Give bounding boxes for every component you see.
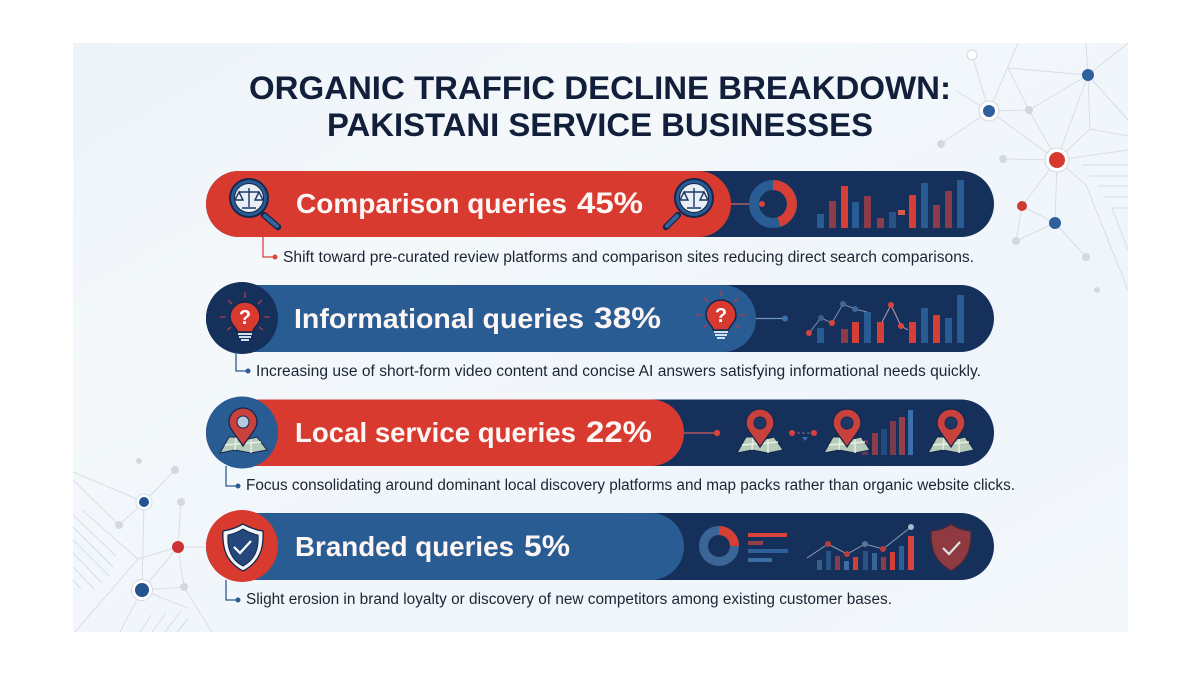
icon: pin map 3: [928, 409, 974, 453]
bar and line chart: [806, 295, 964, 343]
donut chart: [704, 530, 734, 562]
description: Focus consolidating around dominant local discovery platforms and map packs rather than organic website clicks.: [246, 477, 1015, 494]
connector dot: [684, 430, 720, 436]
bar chart: [817, 180, 964, 228]
icon: bulb right: [696, 290, 746, 338]
heading: comparison queries 45%: 45%: [577, 187, 643, 220]
small link: [789, 430, 817, 441]
title: [249, 70, 951, 143]
icon badge: [206, 396, 278, 468]
network decoration: top right: [937, 43, 1128, 293]
bar background: [206, 285, 994, 352]
title: PAKISTANI SERVICE BUSINESSES: [327, 107, 873, 143]
description: Slight erosion in brand loyalty or discovery of new competitors among existing customer bases.: [246, 591, 892, 608]
icon: bulb left: ?: [239, 307, 251, 329]
blue progress segment: [206, 513, 684, 580]
panel: informational queries: [206, 282, 994, 380]
red progress segment: [206, 171, 731, 237]
icon: shield left: [223, 524, 263, 571]
heading: local service queries 22%: Local service queries: [295, 417, 576, 448]
heading: branded queries 5%: 5%: [524, 530, 570, 563]
icon: pin map left: [220, 408, 267, 453]
horizontal bars: [748, 533, 788, 562]
connector: [226, 580, 238, 600]
description: Increasing use of short-form video content and concise AI answers satisfying informational needs quickly.: [256, 363, 981, 380]
heading: branded queries 5%: Branded queries: [295, 531, 514, 562]
panel: branded queries: [206, 510, 994, 608]
panel: local service queries: [206, 396, 1015, 494]
icon: pin map 1: [737, 409, 783, 453]
bar background: [206, 513, 994, 580]
panel: comparison queries: [206, 171, 994, 266]
connector: [263, 237, 275, 257]
icon: shield right: [931, 524, 971, 571]
bar background: [206, 400, 994, 466]
connector: [236, 352, 248, 371]
bar and line chart: [807, 524, 914, 570]
bar chart: [862, 410, 913, 455]
icon: pin map 2: [824, 409, 870, 453]
icon: scales magnifier left: [230, 179, 278, 227]
heading: local service queries 22%: 22%: [586, 416, 652, 449]
donut chart: [731, 185, 792, 223]
icon badge: [206, 282, 278, 354]
connector dot: [756, 316, 788, 322]
title: ORGANIC TRAFFIC DECLINE BREAKDOWN:: [249, 70, 951, 106]
blue progress segment: [206, 285, 756, 352]
icon: scales magnifier right: [666, 179, 713, 227]
description: Shift toward pre-curated review platforms and comparison sites reducing direct search comparisons.: [283, 249, 974, 266]
network decoration: bottom left: [73, 458, 212, 632]
bar background: [206, 171, 994, 237]
connector: [226, 466, 238, 486]
icon: bulb right: ?: [715, 305, 727, 327]
icon: bulb left: [220, 292, 270, 340]
red progress segment: [206, 400, 684, 466]
heading: comparison queries 45%: Comparison queries: [296, 188, 567, 219]
background panel: [73, 43, 1128, 632]
heading: informational queries 38%: Informational queries: [294, 303, 584, 334]
icon badge: [206, 510, 278, 582]
heading: informational queries 38%: 38%: [594, 302, 661, 335]
